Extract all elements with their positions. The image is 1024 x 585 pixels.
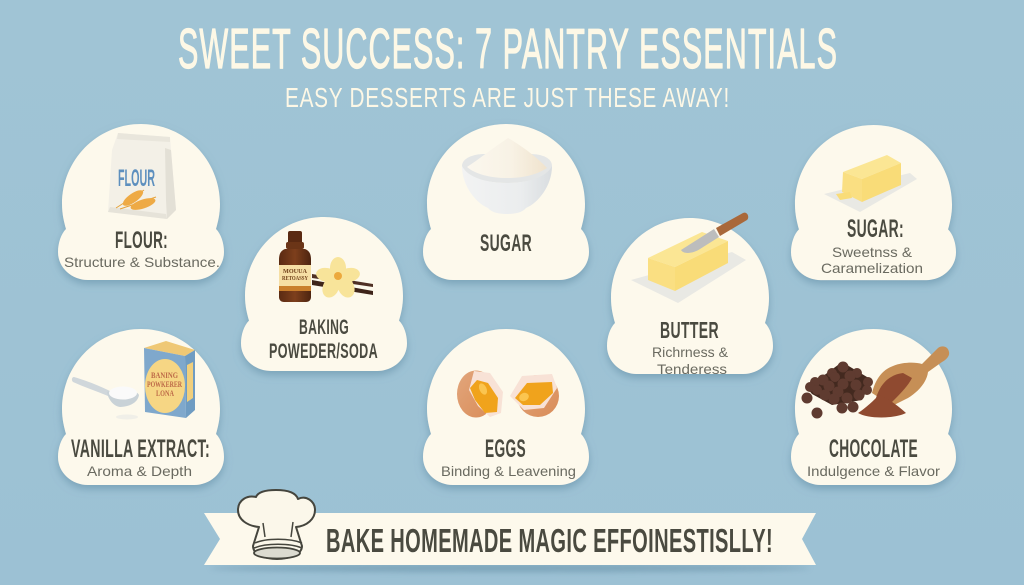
icon: vanilla bottle and flower: MOUUA [283, 269, 308, 275]
label: poweder/soda: POWEDER/SODA [269, 340, 378, 363]
label: vanilla extract: VANILLA EXTRACT: [71, 435, 210, 463]
panel: flour [58, 124, 224, 280]
icon: chef hat [238, 490, 315, 559]
text: sweetness line: Sweetnss & [832, 244, 913, 260]
icon: bowl of sugar [462, 138, 552, 214]
text: flour description: Structure & Substance. [64, 254, 220, 270]
icon: cracked eggs [457, 370, 559, 418]
panel: sugar [423, 124, 589, 280]
label: sugar colon: SUGAR: [847, 215, 904, 243]
label: chocolate: CHOCOLATE [829, 435, 918, 463]
panel: chocolate [791, 329, 956, 485]
icon: spoon and baking box: POWKERER [147, 380, 182, 389]
icon: flour bag [108, 133, 176, 219]
icon: butter block on dish [824, 155, 917, 212]
panel: vanilla extract [58, 329, 224, 485]
panel: sugar sweetness [791, 125, 956, 280]
text: chocolate description: Indulgence & Flavor [807, 463, 940, 479]
subtitle: EASY DESSERTS ARE JUST THESE AWAY! [285, 82, 730, 113]
panel: eggs [423, 329, 589, 485]
label: butter: BUTTER [660, 317, 719, 343]
icon: spoon and baking box: BANING [151, 371, 178, 380]
label: baking: BAKING [299, 316, 349, 339]
icon: flour bag: FLOUR [118, 165, 155, 192]
icon: butter on dish with knife [631, 213, 748, 303]
panel: baking powder/soda [241, 217, 407, 371]
text: vanilla description: Aroma & Depth [87, 463, 192, 479]
label: flour: FLOUR: [115, 227, 168, 254]
text: butter description line 2: Tenderess [657, 361, 727, 377]
icon: vanilla bottle and flower: RETOASSY [282, 276, 309, 282]
icon: vanilla bottle and flower [279, 231, 373, 302]
icon: spoon and baking box [72, 341, 195, 420]
text: caramelization line: Caramelization [821, 260, 923, 276]
panel: butter [607, 213, 773, 377]
text: eggs description: Binding & Leavening [441, 463, 576, 479]
label: eggs: EGGS [485, 435, 526, 463]
icon: chocolate chips and cocoa scoop [802, 346, 949, 418]
label: sugar: SUGAR [480, 230, 532, 257]
text: butter description line 1: Richrness & [652, 344, 729, 360]
icon: spoon and baking box: LONA [156, 389, 174, 398]
banner [204, 490, 816, 572]
